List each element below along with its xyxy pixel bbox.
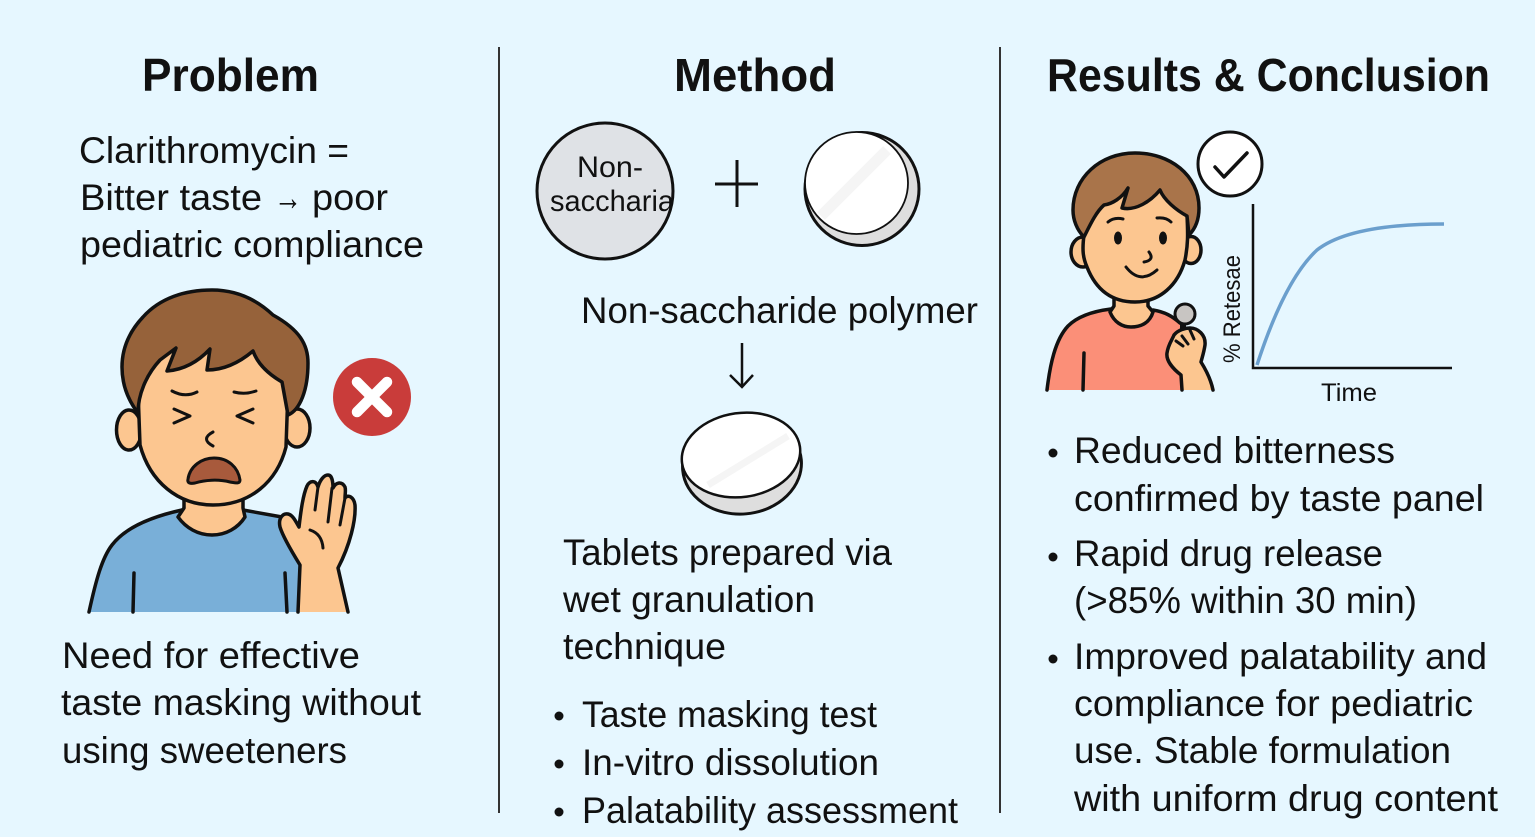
eyes	[1114, 232, 1167, 244]
sleeve lines	[133, 573, 287, 612]
list: conclusions: compliance for pediatric	[1074, 683, 1473, 724]
icon: red cross	[333, 358, 411, 436]
shirt	[89, 510, 300, 612]
text block: wet granulation: wet granulation	[562, 579, 815, 620]
label: non-saccharide polymer: Non-saccharide polymer	[581, 290, 978, 331]
shirt	[1047, 309, 1185, 390]
text block: wet granulation	[562, 532, 892, 667]
hair	[122, 290, 308, 415]
list: conclusions: Reduced bitterness	[1074, 430, 1395, 471]
icon: polymer disc: Non-	[577, 151, 643, 184]
list: conclusions: confirmed by taste panel	[1074, 478, 1484, 519]
list: tests	[554, 694, 959, 831]
fingers	[1176, 330, 1194, 346]
icon: check mark	[1198, 132, 1262, 196]
arrow: down	[730, 343, 753, 387]
ears	[1071, 236, 1201, 267]
list: conclusions: Improved palatability and	[1074, 636, 1487, 677]
text block: wet granulation: technique	[563, 626, 726, 667]
chart: drug release over time	[1219, 204, 1452, 407]
icon: finished tablet	[676, 405, 806, 519]
hand	[1167, 328, 1213, 390]
axes	[1253, 204, 1452, 368]
panel: problem	[61, 49, 424, 771]
icon: smiling boy with tablet	[1047, 153, 1213, 390]
list: conclusions: use. Stable formulation	[1074, 730, 1451, 771]
text block: need for taste masking	[61, 635, 422, 771]
list: conclusions	[1048, 430, 1499, 819]
list: conclusions: Rapid drug release	[1074, 533, 1383, 574]
heading: results and conclusion: Results & Conclusion	[1047, 49, 1490, 101]
list: tests: Taste masking test	[582, 694, 878, 735]
heading: problem: Problem	[142, 49, 319, 101]
finger lines	[310, 487, 345, 548]
icon: plus	[715, 160, 758, 207]
facial features	[1108, 218, 1171, 277]
neck	[178, 496, 245, 535]
panel: results and conclusion	[1047, 49, 1499, 819]
face	[1083, 168, 1188, 302]
shirt line	[1083, 353, 1084, 390]
heading: method: Method	[674, 49, 836, 101]
text block: bitter taste problem: Clarithromycin =	[79, 130, 349, 171]
list: conclusions: with uniform drug content	[1073, 778, 1499, 819]
text block: need for taste masking: using sweeteners	[62, 730, 347, 771]
list: tests: Palatability assessment	[582, 790, 959, 831]
facial features	[172, 391, 256, 446]
text block: bitter taste problem: Bitter taste	[80, 177, 262, 218]
panel: method	[537, 49, 978, 831]
icon: polymer disc	[537, 123, 674, 259]
raised hand	[280, 475, 355, 612]
icon: polymer disc: saccharia	[550, 185, 674, 218]
text block: bitter taste problem: pediatric compliance	[80, 224, 424, 265]
x axis label: Time	[1321, 379, 1377, 407]
held tablet	[1175, 304, 1195, 334]
ears	[116, 409, 310, 450]
text block: bitter taste problem: →	[274, 177, 302, 218]
list: conclusions: (>85% within 30 min)	[1074, 580, 1417, 621]
text block: need for taste masking: Need for effective	[62, 635, 360, 676]
list: tests: In-vitro dissolution	[582, 742, 879, 783]
mouth	[188, 458, 240, 483]
text block: bitter taste problem: poor	[312, 177, 388, 218]
release curve	[1257, 224, 1444, 365]
hair	[1073, 153, 1199, 237]
neck	[1110, 296, 1153, 327]
text block: bitter taste problem	[79, 130, 424, 265]
face	[138, 330, 288, 505]
icon: boy grimacing at bitter taste	[89, 290, 355, 612]
text block: need for taste masking: taste masking without	[61, 682, 422, 723]
text block: wet granulation: Tablets prepared via	[563, 532, 892, 573]
icon: round tablet	[805, 132, 919, 246]
y axis label: % Retesae	[1219, 255, 1246, 363]
